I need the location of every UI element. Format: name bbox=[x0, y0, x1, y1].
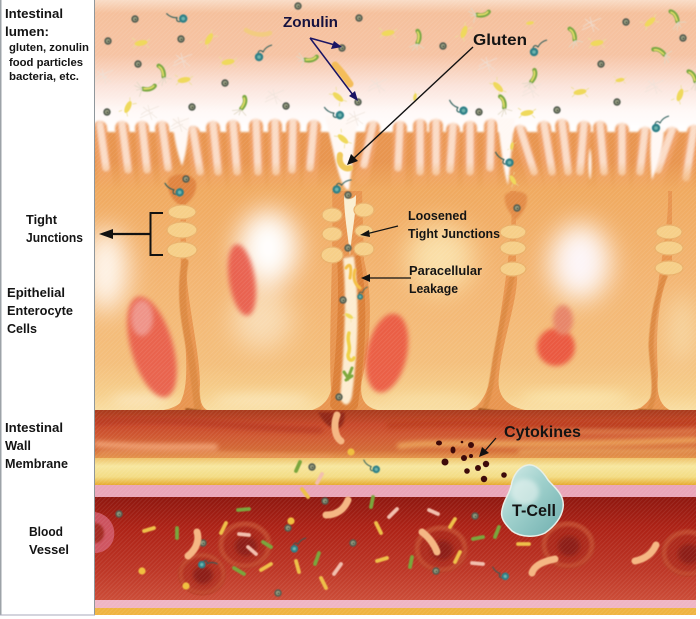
label and arrow: Loosened Tight Junctions: Loosened bbox=[408, 209, 467, 223]
epithelial layer bbox=[84, 116, 700, 420]
intestinal wall membrane bbox=[95, 410, 696, 460]
label: Intestinal Wall Membrane bbox=[5, 421, 68, 471]
loosened junction stack: left bbox=[321, 208, 343, 263]
paracellular leak channel bbox=[330, 195, 365, 412]
tight junction stack: cell 4 bbox=[655, 225, 683, 275]
label and arrow: Loosened Tight Junctions: Tight Junctions bbox=[408, 227, 500, 241]
label and arrows: Zonulin bbox=[283, 14, 358, 101]
tight junctions bbox=[167, 203, 683, 276]
intestinal lumen background bbox=[95, 0, 696, 130]
blood vessel lumen bbox=[86, 497, 700, 601]
label and arrow: Paracellular Leakage: Leakage bbox=[409, 282, 458, 296]
label: Intestinal lumen: gluten, zonulin bbox=[9, 42, 89, 54]
left label panel bbox=[0, 0, 95, 619]
label: Intestinal lumen: Intestinal bbox=[5, 7, 63, 21]
label: Intestinal lumen: food particles bbox=[9, 57, 83, 69]
label: Intestinal Wall Membrane: Intestinal bbox=[5, 421, 63, 435]
right page margin bbox=[696, 0, 700, 619]
cell bodies bbox=[88, 190, 696, 413]
large orange bacilli bbox=[188, 415, 656, 573]
lumen particles: bacteria, gluten, zonulin bbox=[94, 2, 700, 212]
T-cell bbox=[502, 465, 563, 536]
label and arrows: Zonulin: Zonulin bbox=[283, 14, 338, 31]
microvilli brush border bbox=[100, 122, 694, 190]
label and arrow: Gluten: Gluten bbox=[473, 32, 527, 49]
yellow connective band bbox=[95, 458, 696, 485]
blood and wall particles bbox=[115, 415, 656, 597]
grey particles bbox=[115, 463, 479, 597]
red blood cells bbox=[178, 521, 700, 596]
lower cell highlights bbox=[110, 391, 630, 406]
label: Epithelial Enterocyte Cells bbox=[7, 286, 73, 336]
label: Tight Junctions: Tight bbox=[26, 213, 58, 227]
teal particles bbox=[196, 457, 510, 582]
tight junction stack: cell 3 bbox=[500, 225, 526, 276]
tight junction stack: cell 1 bbox=[167, 205, 197, 258]
gaps between microvilli tufts bbox=[172, 116, 664, 190]
label: Intestinal lumen: lumen: bbox=[5, 25, 49, 39]
bacterial rods bbox=[144, 462, 529, 588]
leak channel particles bbox=[335, 244, 370, 401]
cytokines cluster bbox=[436, 440, 507, 482]
label and arrow: Cytokines bbox=[479, 424, 581, 457]
label: Intestinal lumen bbox=[5, 7, 89, 83]
label: Epithelial Enterocyte Cells: Epithelial bbox=[7, 286, 65, 300]
pink vessel wall lower bbox=[95, 600, 696, 608]
label: Intestinal Wall Membrane: Wall bbox=[5, 439, 31, 453]
nuclei bbox=[117, 242, 575, 403]
yellow balls bbox=[138, 448, 355, 590]
teal bacteria bbox=[165, 5, 669, 200]
label: Blood Vessel: Blood bbox=[29, 525, 63, 539]
blend of villi into cell tops bbox=[95, 162, 696, 191]
label: Blood Vessel: Vessel bbox=[29, 543, 69, 557]
label: Epithelial Enterocyte Cells: Cells bbox=[7, 322, 37, 336]
label and arrow: Loosened Tight Junctions bbox=[360, 209, 500, 241]
label and arrow: Cytokines: Cytokines bbox=[504, 424, 581, 441]
label and arrow: Paracellular Leakage: Paracellular bbox=[409, 264, 482, 278]
loosened junction stack: right bbox=[354, 203, 374, 256]
label and arrow: Gluten bbox=[347, 32, 527, 165]
cell junction borders bbox=[182, 262, 668, 414]
zonulin particles bbox=[103, 2, 687, 212]
label: Epithelial Enterocyte Cells: Enterocyte bbox=[7, 304, 73, 318]
T-cell: T-Cell bbox=[512, 502, 556, 520]
label: Blood Vessel bbox=[29, 525, 69, 557]
green bacteria bbox=[134, 5, 700, 119]
goblet pockets between cells bbox=[168, 174, 527, 220]
label: Tight Junctions bbox=[26, 213, 83, 245]
bracket and arrow: tight junctions bbox=[99, 213, 163, 255]
pink vessel wall upper bbox=[95, 485, 696, 497]
yellow gluten particles bbox=[119, 13, 689, 188]
white cytoplasm glows bbox=[84, 210, 694, 366]
label and arrow: Paracellular Leakage bbox=[361, 264, 482, 296]
label: Tight Junctions: Junctions bbox=[26, 231, 83, 245]
label: Intestinal Wall Membrane: Membrane bbox=[5, 457, 68, 471]
faint wisps bbox=[94, 17, 664, 132]
gold outer band bbox=[95, 608, 696, 615]
label: Intestinal lumen: bacteria, etc. bbox=[9, 71, 79, 83]
